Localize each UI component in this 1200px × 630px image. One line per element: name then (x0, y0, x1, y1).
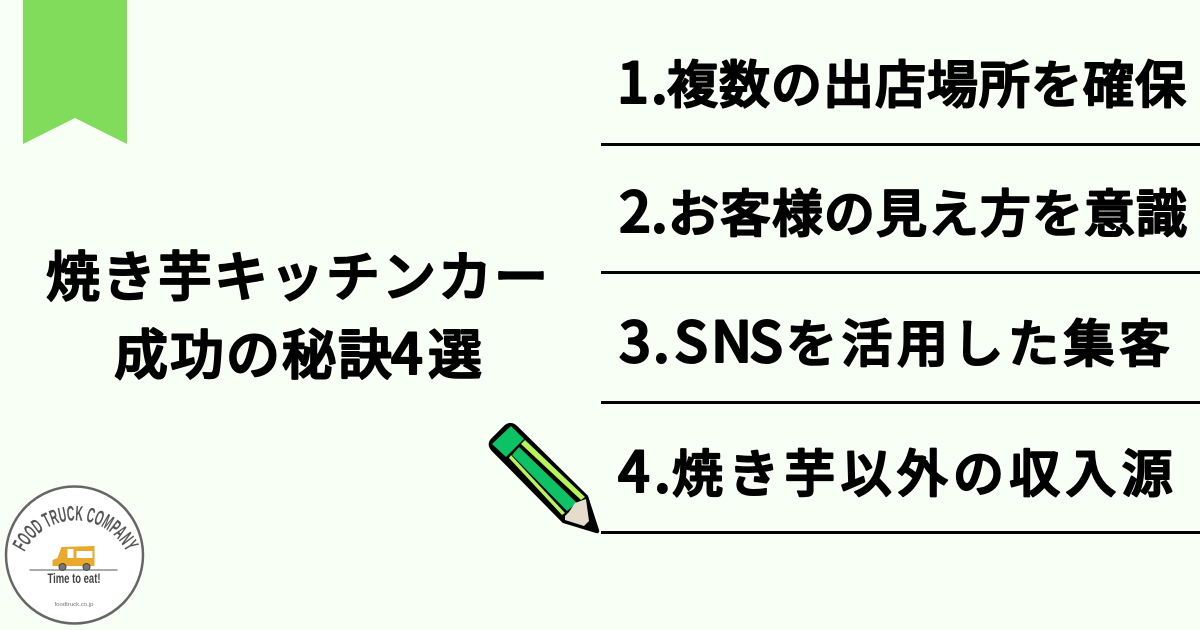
logo tagline: Time to eat! (48, 570, 100, 586)
title line 2: 成功の秘訣 (114, 311, 394, 390)
item 2: お客様の見え方を意識 (668, 173, 1188, 247)
title line 2: 選 (428, 311, 482, 390)
item 4: 4. (618, 428, 671, 509)
truck icon (52, 546, 94, 570)
icon: pencil (491, 425, 597, 531)
title line 2: 4 (391, 310, 423, 391)
item 1: 複数の出店場所を確保 (667, 44, 1187, 118)
ribbon bookmark (23, 0, 127, 144)
logo url: foodtruck.co.jp (54, 602, 94, 608)
title (46, 233, 550, 391)
logo badge (4, 485, 144, 625)
item 3: 3.SNS (619, 298, 783, 379)
item 1: 1. (617, 39, 668, 120)
logo arc text: FOOD TRUCK COMPANY (12, 506, 139, 552)
title line 1: 焼き芋キッチンカー (46, 233, 550, 312)
item 4: 焼き芋以外の収入源 (672, 433, 1178, 507)
item 3: を活用した集客 (786, 303, 1175, 377)
item 2: 2. (619, 168, 668, 249)
